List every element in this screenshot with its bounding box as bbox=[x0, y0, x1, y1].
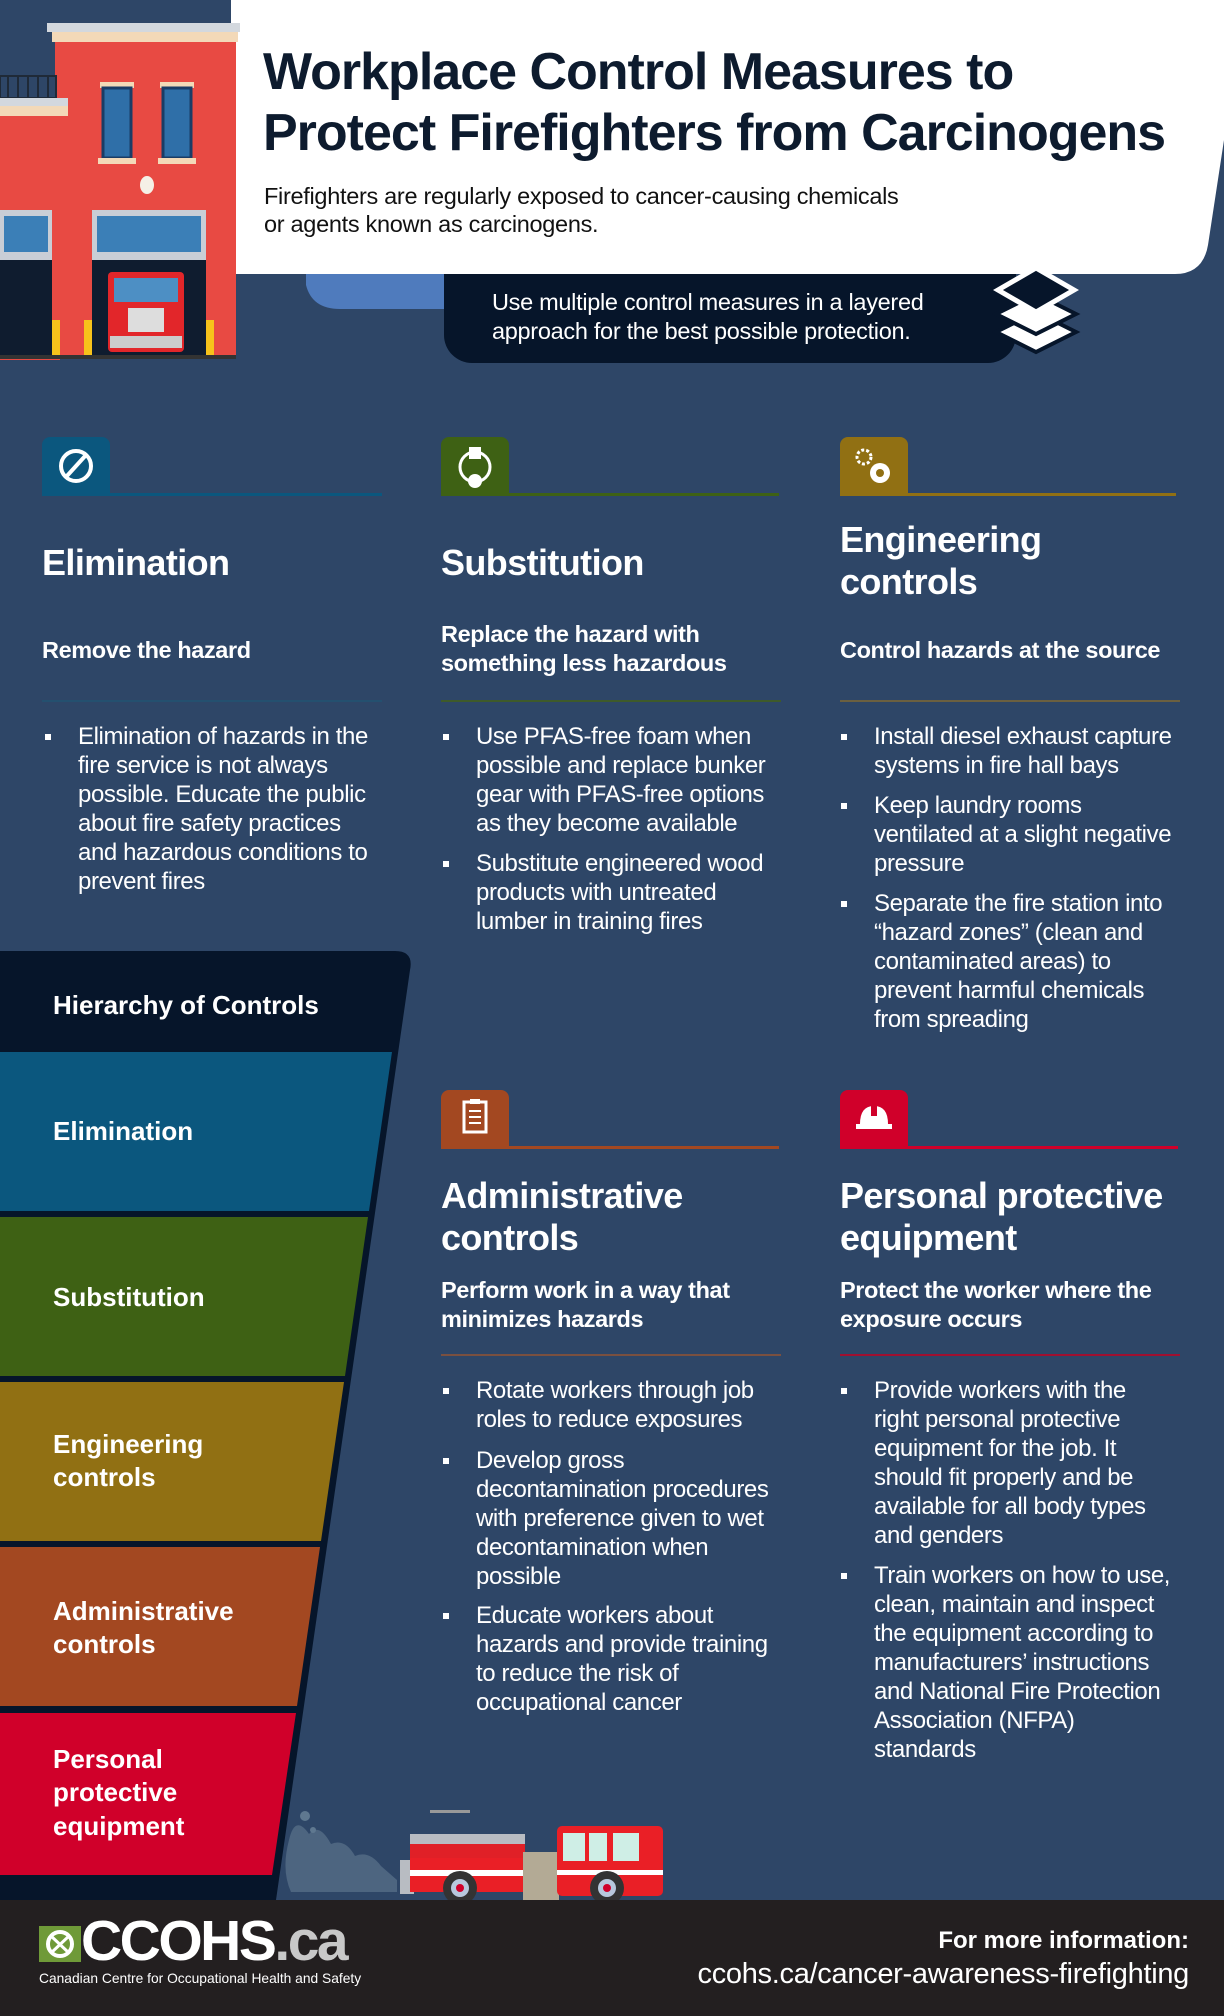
panel: personal protective equipment: the equipment according to bbox=[874, 1620, 1153, 1647]
bullets bbox=[78, 722, 368, 896]
subheading bbox=[441, 1277, 730, 1332]
bullets: right personal protective bbox=[874, 1406, 1120, 1433]
panel: administrative controls: decontamination procedures bbox=[476, 1476, 768, 1503]
subtitle bbox=[264, 183, 898, 237]
panel: engineering controls bbox=[840, 437, 1180, 1033]
bullets bbox=[476, 722, 765, 838]
heading: Substitution bbox=[441, 542, 644, 583]
heading: Engineering bbox=[840, 519, 1041, 560]
panel: substitution bbox=[441, 437, 781, 935]
subtitle: or agents known as carcinogens. bbox=[264, 211, 598, 237]
panel: hierarchy of controls: controls bbox=[53, 1462, 156, 1492]
callout: layered approach bbox=[444, 274, 1016, 363]
panel: administrative controls: occupational cancer bbox=[476, 1689, 682, 1716]
bullets: available for all body types bbox=[874, 1493, 1146, 1520]
bullets bbox=[874, 722, 1172, 780]
bullets: Use PFAS-free foam when bbox=[476, 723, 751, 750]
bullets: prevent fires bbox=[78, 868, 205, 895]
title: Protect Firefighters from Carcinogens bbox=[263, 104, 1165, 162]
bullets: Rotate workers through job bbox=[476, 1377, 754, 1404]
panel: elimination bbox=[42, 437, 382, 895]
title: Workplace Control Measures to bbox=[263, 43, 1013, 101]
panel: administrative controls: hazards and provide training bbox=[476, 1631, 768, 1658]
panel: hierarchy of controls: Hierarchy of Controls bbox=[53, 990, 319, 1020]
panel: hierarchy of controls: Personal bbox=[53, 1744, 163, 1774]
bullets: equipment for the job. It bbox=[874, 1435, 1116, 1462]
bullets bbox=[476, 1376, 754, 1434]
panel: administrative controls: with preference given to wet bbox=[476, 1505, 764, 1532]
header white panel bbox=[231, 0, 1224, 309]
more information: ccohs.ca/cancer-awareness-firefighting bbox=[698, 1958, 1189, 1990]
panel: engineering controls: Keep laundry rooms bbox=[874, 792, 1082, 819]
panel: personal protective equipment: clean, maintain and inspect bbox=[874, 1591, 1154, 1618]
icon: no symbol bbox=[42, 437, 110, 495]
icon: gears bbox=[840, 437, 908, 495]
panel: administrative controls: possible bbox=[476, 1563, 561, 1590]
panel: hierarchy of controls: Substitution bbox=[53, 1282, 205, 1312]
heading: controls bbox=[441, 1217, 578, 1258]
panel: personal protective equipment: and National Fire Protection bbox=[874, 1678, 1160, 1705]
bullets: fire service is not always bbox=[78, 752, 328, 779]
subheading: Control hazards at the source bbox=[840, 637, 1160, 663]
panel: engineering controls: “hazard zones” (clean and bbox=[874, 919, 1143, 946]
panel: administrative controls: Educate workers about bbox=[476, 1602, 713, 1629]
bullets bbox=[874, 1376, 1146, 1550]
illustration: fire hall bbox=[0, 23, 240, 360]
panel: substitution: Substitute engineered wood bbox=[476, 850, 763, 877]
subtitle: Firefighters are regularly exposed to cancer-causing chemicals bbox=[264, 183, 898, 209]
heading bbox=[441, 1175, 683, 1258]
panel: administrative controls: Develop gross bbox=[476, 1447, 624, 1474]
bullets: should fit properly and be bbox=[874, 1464, 1133, 1491]
bullets: systems in fire hall bays bbox=[874, 752, 1119, 779]
panel: engineering controls: contaminated areas) to bbox=[874, 948, 1111, 975]
subheading bbox=[441, 621, 727, 676]
more information bbox=[698, 1927, 1189, 1990]
panel: substitution: products with untreated bbox=[476, 879, 716, 906]
bullets: possible and replace bunker bbox=[476, 752, 765, 779]
panel: administrative controls: to reduce the risk of bbox=[476, 1660, 678, 1687]
panel: personal protective equipment: Train workers on how to use, bbox=[874, 1562, 1170, 1589]
bullets: Install diesel exhaust capture bbox=[874, 723, 1172, 750]
panel: engineering controls: ventilated at a slight negative bbox=[874, 821, 1171, 848]
bullets: Elimination of hazards in the bbox=[78, 723, 368, 750]
callout: layered approach: Use multiple control measures in a layered bbox=[492, 289, 924, 315]
panel: hierarchy of controls: Engineering bbox=[53, 1429, 203, 1459]
heading: controls bbox=[840, 561, 977, 602]
icon: layers bbox=[993, 270, 1080, 354]
logo: CCOHS: CCOHS.ca bbox=[81, 1909, 346, 1973]
panel: hierarchy of controls: Elimination bbox=[53, 1116, 193, 1146]
logo: CCOHS bbox=[39, 1909, 362, 1986]
illustration: fire truck with smoke bbox=[286, 1810, 663, 1900]
heading: Administrative bbox=[441, 1175, 683, 1216]
footer bbox=[0, 1900, 1224, 2016]
panel: administrative controls bbox=[441, 1090, 781, 1716]
panel: hierarchy of controls: protective bbox=[53, 1777, 177, 1807]
subheading: Remove the hazard bbox=[42, 637, 251, 663]
subheading: something less hazardous bbox=[441, 650, 727, 676]
panel: engineering controls: from spreading bbox=[874, 1006, 1028, 1033]
panel: personal protective equipment bbox=[840, 1090, 1180, 1763]
bullets: Provide workers with the bbox=[874, 1377, 1126, 1404]
panel: hierarchy of controls: controls bbox=[53, 1629, 156, 1659]
panel: substitution: lumber in training fires bbox=[476, 908, 702, 935]
heading bbox=[840, 1175, 1163, 1258]
logo: CCOHS: Canadian Centre for Occupational Health and Safety bbox=[39, 1971, 361, 1986]
panel: hierarchy of controls bbox=[0, 951, 411, 1900]
heading bbox=[840, 519, 1041, 602]
bullets: about fire safety practices bbox=[78, 810, 341, 837]
panel: administrative controls: decontamination when bbox=[476, 1534, 708, 1561]
panel: personal protective equipment: manufacturers’ instructions bbox=[874, 1649, 1149, 1676]
heading: Personal protective bbox=[840, 1175, 1163, 1216]
panel: hierarchy of controls: equipment bbox=[53, 1811, 185, 1841]
bullets: as they become available bbox=[476, 810, 737, 837]
icon: hard hat bbox=[840, 1090, 908, 1148]
heading: equipment bbox=[840, 1217, 1017, 1258]
bullets: roles to reduce exposures bbox=[476, 1406, 742, 1433]
bullets: and hazardous conditions to bbox=[78, 839, 367, 866]
panel: hierarchy of controls: Administrative bbox=[53, 1596, 234, 1626]
subheading: Protect the worker where the bbox=[840, 1277, 1151, 1303]
panel: engineering controls: Separate the fire station into bbox=[874, 890, 1162, 917]
panel: personal protective equipment: standards bbox=[874, 1736, 976, 1763]
subheading: exposure occurs bbox=[840, 1306, 1022, 1332]
panel: engineering controls: prevent harmful chemicals bbox=[874, 977, 1144, 1004]
bullets: and genders bbox=[874, 1522, 1003, 1549]
subheading bbox=[840, 1277, 1151, 1332]
more information: For more information: bbox=[938, 1927, 1189, 1954]
icon: swap bbox=[441, 437, 509, 495]
title bbox=[263, 43, 1165, 162]
subheading: Perform work in a way that bbox=[441, 1277, 730, 1303]
callout: layered approach: approach for the best possible protection. bbox=[492, 318, 911, 344]
subheading: Replace the hazard with bbox=[441, 621, 700, 647]
panel: personal protective equipment: Association (NFPA) bbox=[874, 1707, 1074, 1734]
icon: clipboard bbox=[441, 1090, 509, 1148]
subheading: minimizes hazards bbox=[441, 1306, 643, 1332]
bullets: possible. Educate the public bbox=[78, 781, 366, 808]
panel: engineering controls: pressure bbox=[874, 850, 964, 877]
bullets: gear with PFAS-free options bbox=[476, 781, 764, 808]
heading: Elimination bbox=[42, 542, 229, 583]
